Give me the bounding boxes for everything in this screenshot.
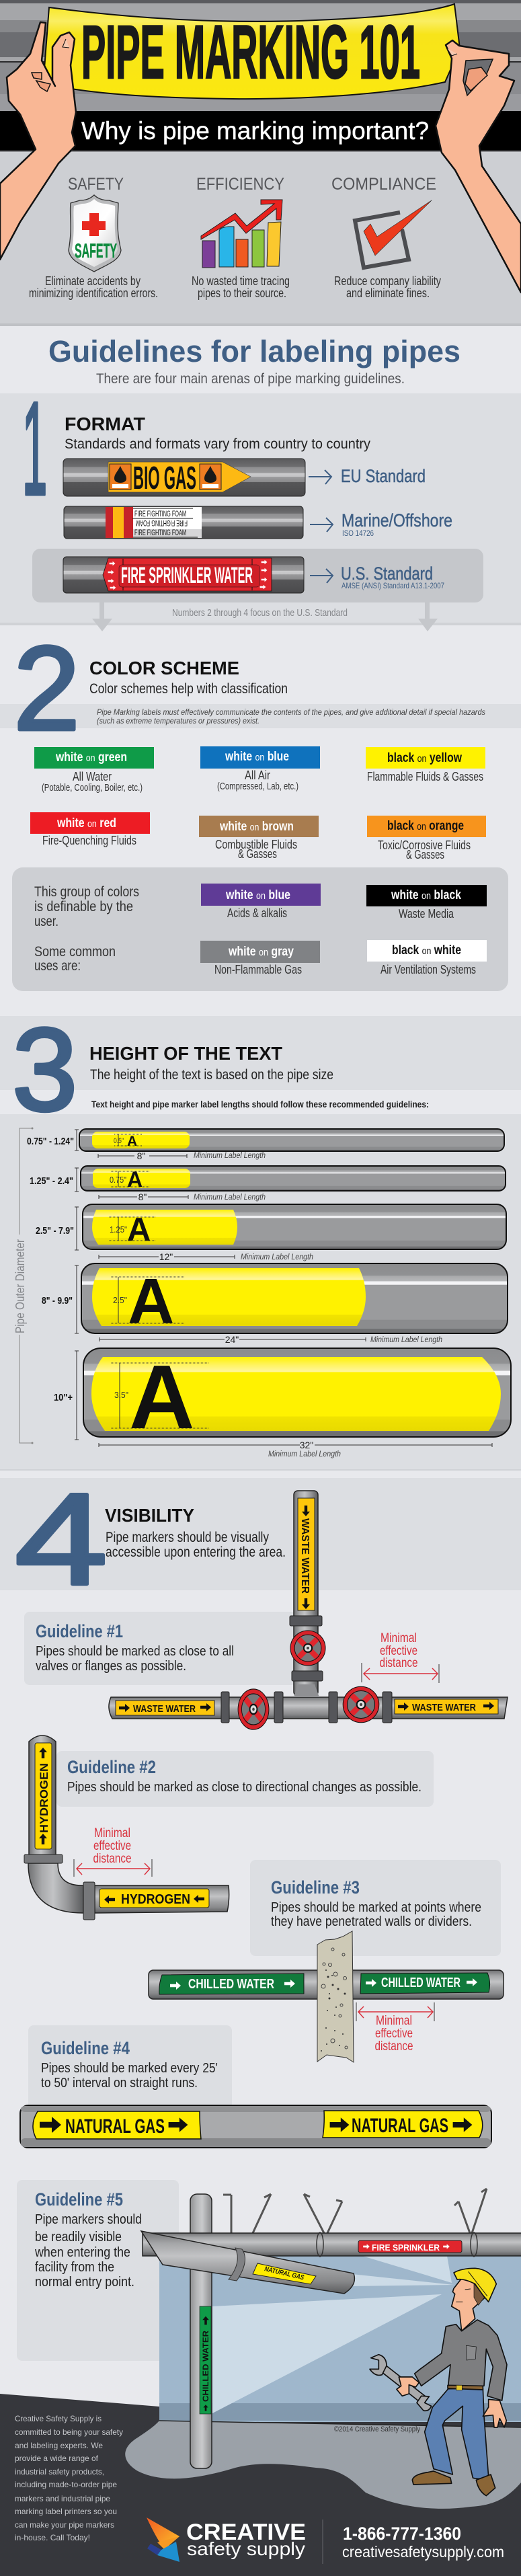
wall bbox=[317, 1931, 354, 2062]
callout: minimal distance guideline 2 bbox=[74, 1826, 152, 1877]
heading: efficiency: EFFICIENCY bbox=[196, 175, 284, 194]
subheading: There are four main arenas of pipe marking guidelines. bbox=[96, 371, 405, 387]
swatch: black on orange bbox=[367, 816, 486, 837]
text: toxic fluids bbox=[378, 838, 471, 861]
text: guideline 5 body: normal entry point. bbox=[35, 2275, 134, 2290]
vertical pipe bbox=[190, 2194, 212, 2468]
marker: right chilled water: CHILLED WATER bbox=[381, 1976, 460, 1990]
row: 8 to 9.9 inch pipe: 8" - 9.9" bbox=[42, 1296, 73, 1306]
callout: minimal distance guideline 2: distance bbox=[93, 1852, 132, 1866]
marker: left chilled water bbox=[159, 1974, 304, 1994]
footer: company blurb: industrial safety products, bbox=[15, 2467, 104, 2476]
text: all water: All Water bbox=[73, 770, 112, 783]
illustration: T pipe with valves and waste water markers bbox=[109, 1491, 508, 1727]
callout: minimal distance guideline 1: effective bbox=[380, 1644, 417, 1658]
text: combustible fluids: & Gasses bbox=[238, 847, 277, 861]
swatch: white on brown: white on brown bbox=[219, 820, 294, 834]
panel: guideline 2 bbox=[56, 1751, 434, 1807]
row: 10 inch plus pipe: 3.5" bbox=[114, 1390, 128, 1400]
eye and mouth bbox=[456, 2289, 471, 2302]
row: 8 to 9.9 inch pipe: 2.5" bbox=[113, 1295, 127, 1305]
label: fire sprinkler water bbox=[103, 558, 272, 591]
text: all water: (Potable, Cooling, Boiler, etc.) bbox=[42, 782, 143, 793]
text: Pipes should be marked as close to directional changes as possible. bbox=[67, 1780, 422, 1795]
label: fire fighting foam: FIRE FIGHTING FOAM bbox=[134, 509, 186, 518]
text: compliance description bbox=[334, 274, 441, 300]
icon: safety shield: SAFETY bbox=[75, 240, 117, 262]
marker: fire sprinkler: FIRE SPRINKLER bbox=[372, 2242, 440, 2253]
text: guideline 5 body: when entering the bbox=[34, 2245, 130, 2260]
marker: left natural gas bbox=[33, 2111, 201, 2139]
flanges bbox=[24, 1855, 95, 1920]
row: 0.75 to 1.24 inch pipe: 8" bbox=[137, 1150, 145, 1161]
text: group of colors: is definable by the bbox=[34, 899, 133, 914]
neck and face bbox=[452, 2278, 485, 2331]
marker: natural gas bbox=[253, 2263, 316, 2284]
text: common uses bbox=[34, 944, 116, 974]
row: 10 inch plus pipe bbox=[54, 1346, 511, 1458]
contact details bbox=[342, 2524, 504, 2561]
heading: Guidelines for labeling pipes bbox=[48, 334, 460, 368]
text: they have penetrated walls or dividers. bbox=[271, 1914, 472, 1929]
marker: chilled water bbox=[200, 2306, 211, 2414]
row: 2.5 to 7.9 inch pipe: 12" bbox=[159, 1251, 173, 1262]
label: EU standard: EU Standard bbox=[341, 466, 426, 486]
arrow to US standard bbox=[310, 569, 333, 583]
illustration: natural gas pipe bbox=[20, 2105, 491, 2148]
text: group of colors: This group of colors bbox=[34, 884, 139, 900]
numeral 1: 1 bbox=[22, 375, 47, 523]
row: 0.75 to 1.24 inch pipe: Minimum Label Length bbox=[194, 1152, 266, 1160]
valves bbox=[240, 1633, 377, 1727]
row: 0.75 to 1.24 inch pipe: 0.75" - 1.24" bbox=[27, 1136, 74, 1147]
text bbox=[271, 1900, 481, 1929]
swatch: white on black: white on black bbox=[391, 888, 461, 902]
heading: Guideline #3 bbox=[271, 1877, 360, 1898]
text: recommended guidelines: Text height and pipe marker label lengths should follow these recommended guidelines: bbox=[91, 1099, 429, 1109]
swatch: white on red: white on red bbox=[56, 816, 116, 830]
row: 1.25 to 2.4 inch pipe: Minimum Label Length bbox=[194, 1194, 266, 1202]
text: safety description: minimizing identification errors. bbox=[29, 286, 158, 300]
illustration: facility scene bbox=[125, 2189, 521, 2509]
footer: company blurb: markers and industrial pipe bbox=[15, 2494, 110, 2503]
panel: why is pipe marking important band bbox=[0, 111, 521, 151]
marker: vertical waste water: WASTE WATER bbox=[299, 1518, 311, 1594]
swatch: white on blue purple bbox=[201, 884, 321, 906]
hangers bbox=[223, 2189, 487, 2252]
row: 8 to 9.9 inch pipe: Minimum Label Length bbox=[370, 1336, 442, 1344]
row: 2.5 to 7.9 inch pipe bbox=[36, 1204, 506, 1262]
arrow: down right bbox=[418, 602, 438, 631]
footer: company blurb: and labeling experts. We bbox=[15, 2441, 103, 2450]
text: guideline 5 body: facility from the bbox=[35, 2260, 114, 2275]
text: safety description: Eliminate accidents by bbox=[45, 274, 141, 288]
text: Pipes should be marked as close to all bbox=[36, 1644, 234, 1659]
row: 1.25 to 2.4 inch pipe bbox=[30, 1166, 506, 1202]
text: group of colors bbox=[34, 884, 139, 929]
heading: format: FORMAT bbox=[65, 414, 145, 434]
text: all air: (Compressed, Lab, etc.) bbox=[217, 781, 298, 792]
shirt bbox=[415, 2320, 507, 2401]
marker: natural gas: NATURAL GAS bbox=[264, 2265, 305, 2281]
footer: company blurb: can make your pipe markers bbox=[15, 2520, 114, 2530]
row: 0.75 to 1.24 inch pipe: A bbox=[127, 1134, 137, 1149]
hair bbox=[474, 2284, 485, 2305]
swatch: black on yellow bbox=[366, 747, 485, 769]
panel: guideline 5 bbox=[17, 2180, 179, 2361]
floor bbox=[125, 2421, 521, 2509]
row: 1.25 to 2.4 inch pipe: 0.75" bbox=[110, 1175, 126, 1185]
swatch: white on blue: white on blue bbox=[225, 750, 289, 764]
wrench bbox=[370, 2355, 432, 2411]
text: safety description bbox=[29, 274, 158, 300]
icon: checkbox with red tick bbox=[355, 200, 432, 268]
label: bio gas: BIO GAS bbox=[133, 461, 196, 496]
callout: minimal distance guideline 3: distance bbox=[375, 2039, 413, 2054]
marker: left waste water: WASTE WATER bbox=[133, 1703, 196, 1715]
note: pipe marking labels bbox=[97, 707, 485, 726]
banner: yellow pipe marking label bbox=[43, 4, 460, 99]
copyright: ©2014 Creative Safety Supply bbox=[334, 2425, 420, 2433]
text: efficiency description bbox=[192, 274, 290, 300]
row: 1.25 to 2.4 inch pipe: 1.25" - 2.4" bbox=[30, 1176, 73, 1187]
pipe: EU standard bbox=[63, 459, 305, 496]
text: height description: The height of the text is based on the pipe size bbox=[90, 1067, 333, 1083]
row: 0.75 to 1.24 inch pipe bbox=[27, 1129, 504, 1161]
illustration: right hand holding banner bbox=[436, 40, 521, 292]
axis: pipe outer diameter: Pipe Outer Diameter bbox=[13, 1239, 27, 1333]
text: Pipes should be marked at points where bbox=[271, 1900, 481, 1915]
marker: right natural gas bbox=[323, 2111, 483, 2138]
marker: horizontal hydrogen: HYDROGEN bbox=[121, 1892, 190, 1907]
text: valves or flanges as possible. bbox=[36, 1659, 186, 1674]
swatch: black on white: black on white bbox=[392, 943, 461, 958]
footer: company blurb: in-house. Call Today! bbox=[15, 2533, 90, 2542]
label: fire fighting foam: FIRE FIGHTING FOAM bbox=[136, 518, 188, 528]
callout: minimal distance guideline 1: distance bbox=[379, 1656, 418, 1670]
note: numbers 2 through 4: Numbers 2 through 4 focus on the U.S. Standard bbox=[172, 608, 348, 619]
row: 10 inch plus pipe: A bbox=[129, 1346, 195, 1448]
text: combustible fluids bbox=[215, 838, 297, 861]
footer: company blurb: provide a wide range of bbox=[15, 2454, 99, 2463]
footer dark background bbox=[0, 2394, 521, 2576]
marker: vertical hydrogen: HYDROGEN bbox=[38, 1763, 50, 1833]
vertical section bbox=[29, 1735, 56, 1856]
divider bbox=[322, 2520, 323, 2564]
contact details: creativesafetysupply.com bbox=[342, 2543, 504, 2561]
contact details: 1-866-777-1360 bbox=[343, 2524, 461, 2544]
illustration: worker with wrench bbox=[370, 2268, 507, 2496]
vertical pipe bbox=[294, 1491, 318, 1696]
panel: 2 color scheme bbox=[0, 621, 521, 991]
row: 8 to 9.9 inch pipe bbox=[42, 1263, 508, 1345]
ceiling pipe bbox=[143, 2233, 521, 2256]
row: 8 to 9.9 inch pipe: 24" bbox=[225, 1334, 239, 1345]
heading: height of the text: HEIGHT OF THE TEXT bbox=[89, 1043, 282, 1064]
numeral 3: 3 bbox=[12, 1005, 77, 1136]
text: all air bbox=[217, 769, 298, 792]
text: visibility description bbox=[106, 1530, 286, 1560]
row: 0.75 to 1.24 inch pipe: 0.5" bbox=[114, 1137, 124, 1145]
belt bbox=[448, 2385, 483, 2390]
heading: Guideline #2 bbox=[67, 1757, 156, 1777]
heading: visibility: VISIBILITY bbox=[105, 1505, 194, 1526]
numeral 4: 4 bbox=[15, 1467, 108, 1612]
callout: minimal distance guideline 3 bbox=[356, 2002, 434, 2054]
text: format description: Standards and formats vary from country to country bbox=[65, 436, 370, 452]
hard hat bbox=[454, 2268, 496, 2302]
swatch: white on green bbox=[34, 747, 154, 769]
marker: left natural gas: NATURAL GAS bbox=[65, 2115, 165, 2138]
footer: company blurb bbox=[15, 2414, 123, 2542]
icon: safety shield bbox=[69, 195, 121, 272]
label: fire fighting foam bbox=[106, 507, 202, 538]
text: efficiency description: No wasted time tracing bbox=[192, 274, 290, 288]
marker: vertical hydrogen bbox=[35, 1743, 52, 1849]
angled natural gas pipe bbox=[141, 2231, 354, 2294]
panel: 3 height of the text bbox=[0, 1005, 521, 1469]
swatch: black on orange: black on orange bbox=[387, 819, 464, 833]
footer: company blurb: marking label printers so you bbox=[15, 2507, 117, 2516]
label: marine offshore: Marine/Offshore bbox=[342, 510, 452, 531]
text: compliance description: Reduce company liability bbox=[334, 274, 441, 288]
callout: minimal distance guideline 3: effective bbox=[375, 2027, 413, 2041]
swatch: black on white bbox=[367, 940, 487, 962]
label: US standard: U.S. Standard bbox=[341, 563, 433, 584]
text: air ventilation: Air Ventilation Systems bbox=[380, 963, 476, 976]
callout: minimal distance guideline 2: effective bbox=[93, 1839, 131, 1853]
panel: guideline 1 bbox=[24, 1612, 296, 1685]
pipe: US standard bbox=[63, 557, 304, 593]
panel: US standard highlight bbox=[32, 549, 483, 602]
note: pipe marking labels: Pipe Marking labels must effectively communicate the contents of the pipes, and give additional detail if special hazards bbox=[97, 707, 485, 717]
pocket bbox=[466, 2345, 476, 2360]
illustration: left hand holding banner bbox=[0, 22, 76, 260]
arrow: down left bbox=[92, 602, 112, 631]
marker: left chilled water: CHILLED WATER bbox=[188, 1977, 274, 1992]
strip: guideline sentence background bbox=[0, 1090, 521, 1114]
heading: compliance: COMPLIANCE bbox=[331, 175, 436, 194]
sight lines bbox=[212, 2256, 454, 2413]
panel: guidelines heading bbox=[0, 326, 521, 393]
panel: 1 format bbox=[0, 375, 521, 625]
text: color scheme description: Color schemes help with classification bbox=[89, 681, 288, 697]
swatch: white on brown bbox=[199, 816, 319, 837]
text: toxic fluids: Toxic/Corrosive Fluids bbox=[378, 838, 471, 852]
flanges bbox=[221, 1616, 392, 1723]
label: ISO 14726: ISO 14726 bbox=[342, 529, 374, 538]
row: 2.5 to 7.9 inch pipe: Minimum Label Length bbox=[241, 1253, 313, 1261]
trousers bbox=[425, 2388, 489, 2479]
icon: rising bar chart bbox=[201, 200, 282, 268]
callout: minimal distance guideline 1: Minimal bbox=[380, 1631, 417, 1645]
swatch: white on blue bbox=[200, 746, 320, 769]
axis: pipe outer diameter bbox=[13, 1127, 34, 1444]
heading: Guideline #1 bbox=[36, 1621, 123, 1641]
marker: vertical waste water bbox=[298, 1498, 315, 1610]
logo wordmark: safety supply bbox=[187, 2538, 305, 2559]
text: all water bbox=[42, 770, 143, 793]
text: waste media: Waste Media bbox=[399, 907, 454, 921]
hands bbox=[483, 2399, 506, 2427]
footer: company blurb: Creative Safety Supply is bbox=[15, 2414, 102, 2423]
text: compliance description: and eliminate fines. bbox=[346, 286, 430, 300]
text: acids: Acids & alkalis bbox=[227, 906, 287, 920]
illustration: pipe penetrating wall with chilled water markers bbox=[149, 1931, 504, 2062]
text: common uses: uses are: bbox=[34, 958, 81, 974]
text: guideline 5 body: be readily visible bbox=[35, 2230, 122, 2245]
callout: minimal distance guideline 2: Minimal bbox=[94, 1826, 130, 1840]
boots bbox=[412, 2471, 452, 2485]
footer: company blurb: committed to being your safety bbox=[15, 2427, 123, 2437]
header: ceiling pipes backdrop bbox=[0, 0, 521, 111]
row: 10 inch plus pipe: 32" bbox=[300, 1440, 313, 1450]
marker: left waste water bbox=[116, 1701, 214, 1715]
row: 2.5 to 7.9 inch pipe: A bbox=[127, 1212, 151, 1248]
text: visibility description: Pipe markers should be visually bbox=[106, 1530, 269, 1545]
panel: user definable colors bbox=[12, 867, 508, 991]
strip: note background bbox=[0, 704, 521, 728]
logo mark bbox=[147, 2518, 179, 2562]
callout: minimal distance guideline 3: Minimal bbox=[376, 2014, 412, 2028]
marker: right waste water bbox=[395, 1699, 498, 1714]
logo wordmark bbox=[186, 2520, 306, 2559]
panel: guideline 3 bbox=[250, 1860, 501, 1956]
row: 8 to 9.9 inch pipe: A bbox=[128, 1265, 174, 1337]
row: 1.25 to 2.4 inch pipe: A bbox=[127, 1167, 143, 1192]
swatch: white on green: white on green bbox=[55, 750, 127, 765]
pipe bbox=[149, 1970, 504, 1999]
marker: right natural gas: NATURAL GAS bbox=[352, 2115, 448, 2137]
horizontal pipe bbox=[109, 1697, 508, 1719]
row: 2.5 to 7.9 inch pipe: 2.5" - 7.9" bbox=[36, 1226, 74, 1237]
text: to 50' interval on straight runs. bbox=[41, 2076, 198, 2091]
marker: right chilled water bbox=[360, 1973, 490, 1994]
marker: chilled water: CHILLED WATER bbox=[201, 2331, 210, 2402]
marker: fire sprinkler bbox=[358, 2240, 462, 2253]
horizontal section bbox=[95, 1885, 229, 1913]
illustration: hydrogen elbow pipe bbox=[24, 1735, 229, 1920]
panel: 4 visibility header bbox=[0, 1467, 521, 1612]
text: guideline 5 body bbox=[34, 2212, 142, 2290]
text: visibility description: accessible upon entering the area. bbox=[106, 1545, 286, 1560]
row: 1.25 to 2.4 inch pipe: 8" bbox=[138, 1192, 147, 1202]
heading: Guideline #5 bbox=[35, 2189, 123, 2210]
swatch: white on blue purple: white on blue bbox=[225, 888, 290, 902]
elbow bbox=[28, 1863, 83, 1913]
marker: right waste water: WASTE WATER bbox=[412, 1702, 476, 1713]
logo wordmark: CREATIVE bbox=[186, 2520, 306, 2545]
text: common uses: Some common bbox=[34, 944, 116, 960]
panel: guideline 4 bbox=[28, 2025, 232, 2109]
label: fire sprinkler water: FIRE SPRINKLER WATER bbox=[121, 563, 253, 588]
swatch: white on gray: white on gray bbox=[228, 945, 294, 959]
marker: horizontal hydrogen bbox=[99, 1889, 209, 1908]
pipe straps bbox=[317, 2232, 477, 2257]
text: fire quenching: Fire-Quenching Fluids bbox=[42, 834, 136, 847]
text: non flammable gas: Non-Flammable Gas bbox=[214, 963, 302, 976]
text: Pipes should be marked every 25' bbox=[41, 2061, 218, 2076]
wall bbox=[159, 2246, 521, 2422]
footer: company blurb: including made-to-order pipe bbox=[15, 2480, 117, 2489]
arrow to EU standard bbox=[309, 470, 331, 484]
text: group of colors: user. bbox=[34, 914, 58, 929]
heading: color scheme: COLOR SCHEME bbox=[89, 658, 239, 678]
swatch: black on yellow: black on yellow bbox=[387, 751, 462, 765]
text: toxic fluids: & Gasses bbox=[406, 848, 444, 861]
numeral 2: 2 bbox=[13, 621, 80, 755]
text: guideline 5 body: Pipe markers should bbox=[35, 2212, 142, 2227]
swatch: white on gray bbox=[200, 941, 320, 963]
text bbox=[36, 1644, 234, 1674]
callout: minimal distance guideline 1 bbox=[362, 1631, 439, 1683]
pipe: marine offshore bbox=[64, 506, 303, 539]
row: 2.5 to 7.9 inch pipe: 1.25" bbox=[110, 1224, 127, 1235]
heading: safety: SAFETY bbox=[68, 175, 124, 194]
heading: Guideline #4 bbox=[41, 2038, 130, 2058]
row: 10 inch plus pipe: 10"+ bbox=[54, 1393, 73, 1403]
panel: importance section bbox=[0, 151, 521, 326]
label: fire fighting foam: FIRE FIGHTING FOAM bbox=[134, 528, 186, 537]
text: efficiency description: pipes to their source. bbox=[198, 286, 286, 300]
text bbox=[41, 2061, 218, 2091]
label: ANSI standard: AMSE (ANSI) Standard A13.1-2007 bbox=[342, 581, 444, 590]
text: combustible fluids: Combustible Fluids bbox=[215, 838, 297, 851]
arrow to marine standard bbox=[310, 518, 333, 532]
subtitle: Why is pipe marking important? bbox=[81, 117, 429, 145]
swatch: white on red bbox=[30, 812, 150, 834]
row: 10 inch plus pipe: Minimum Label Length bbox=[268, 1450, 341, 1458]
text: flammable fluids: Flammable Fluids & Gasses bbox=[367, 770, 483, 783]
note: pipe marking labels: (such as extreme temperatures or pressures) exist. bbox=[97, 716, 259, 726]
text: all air: All Air bbox=[245, 769, 270, 782]
swatch: white on black bbox=[366, 885, 487, 906]
